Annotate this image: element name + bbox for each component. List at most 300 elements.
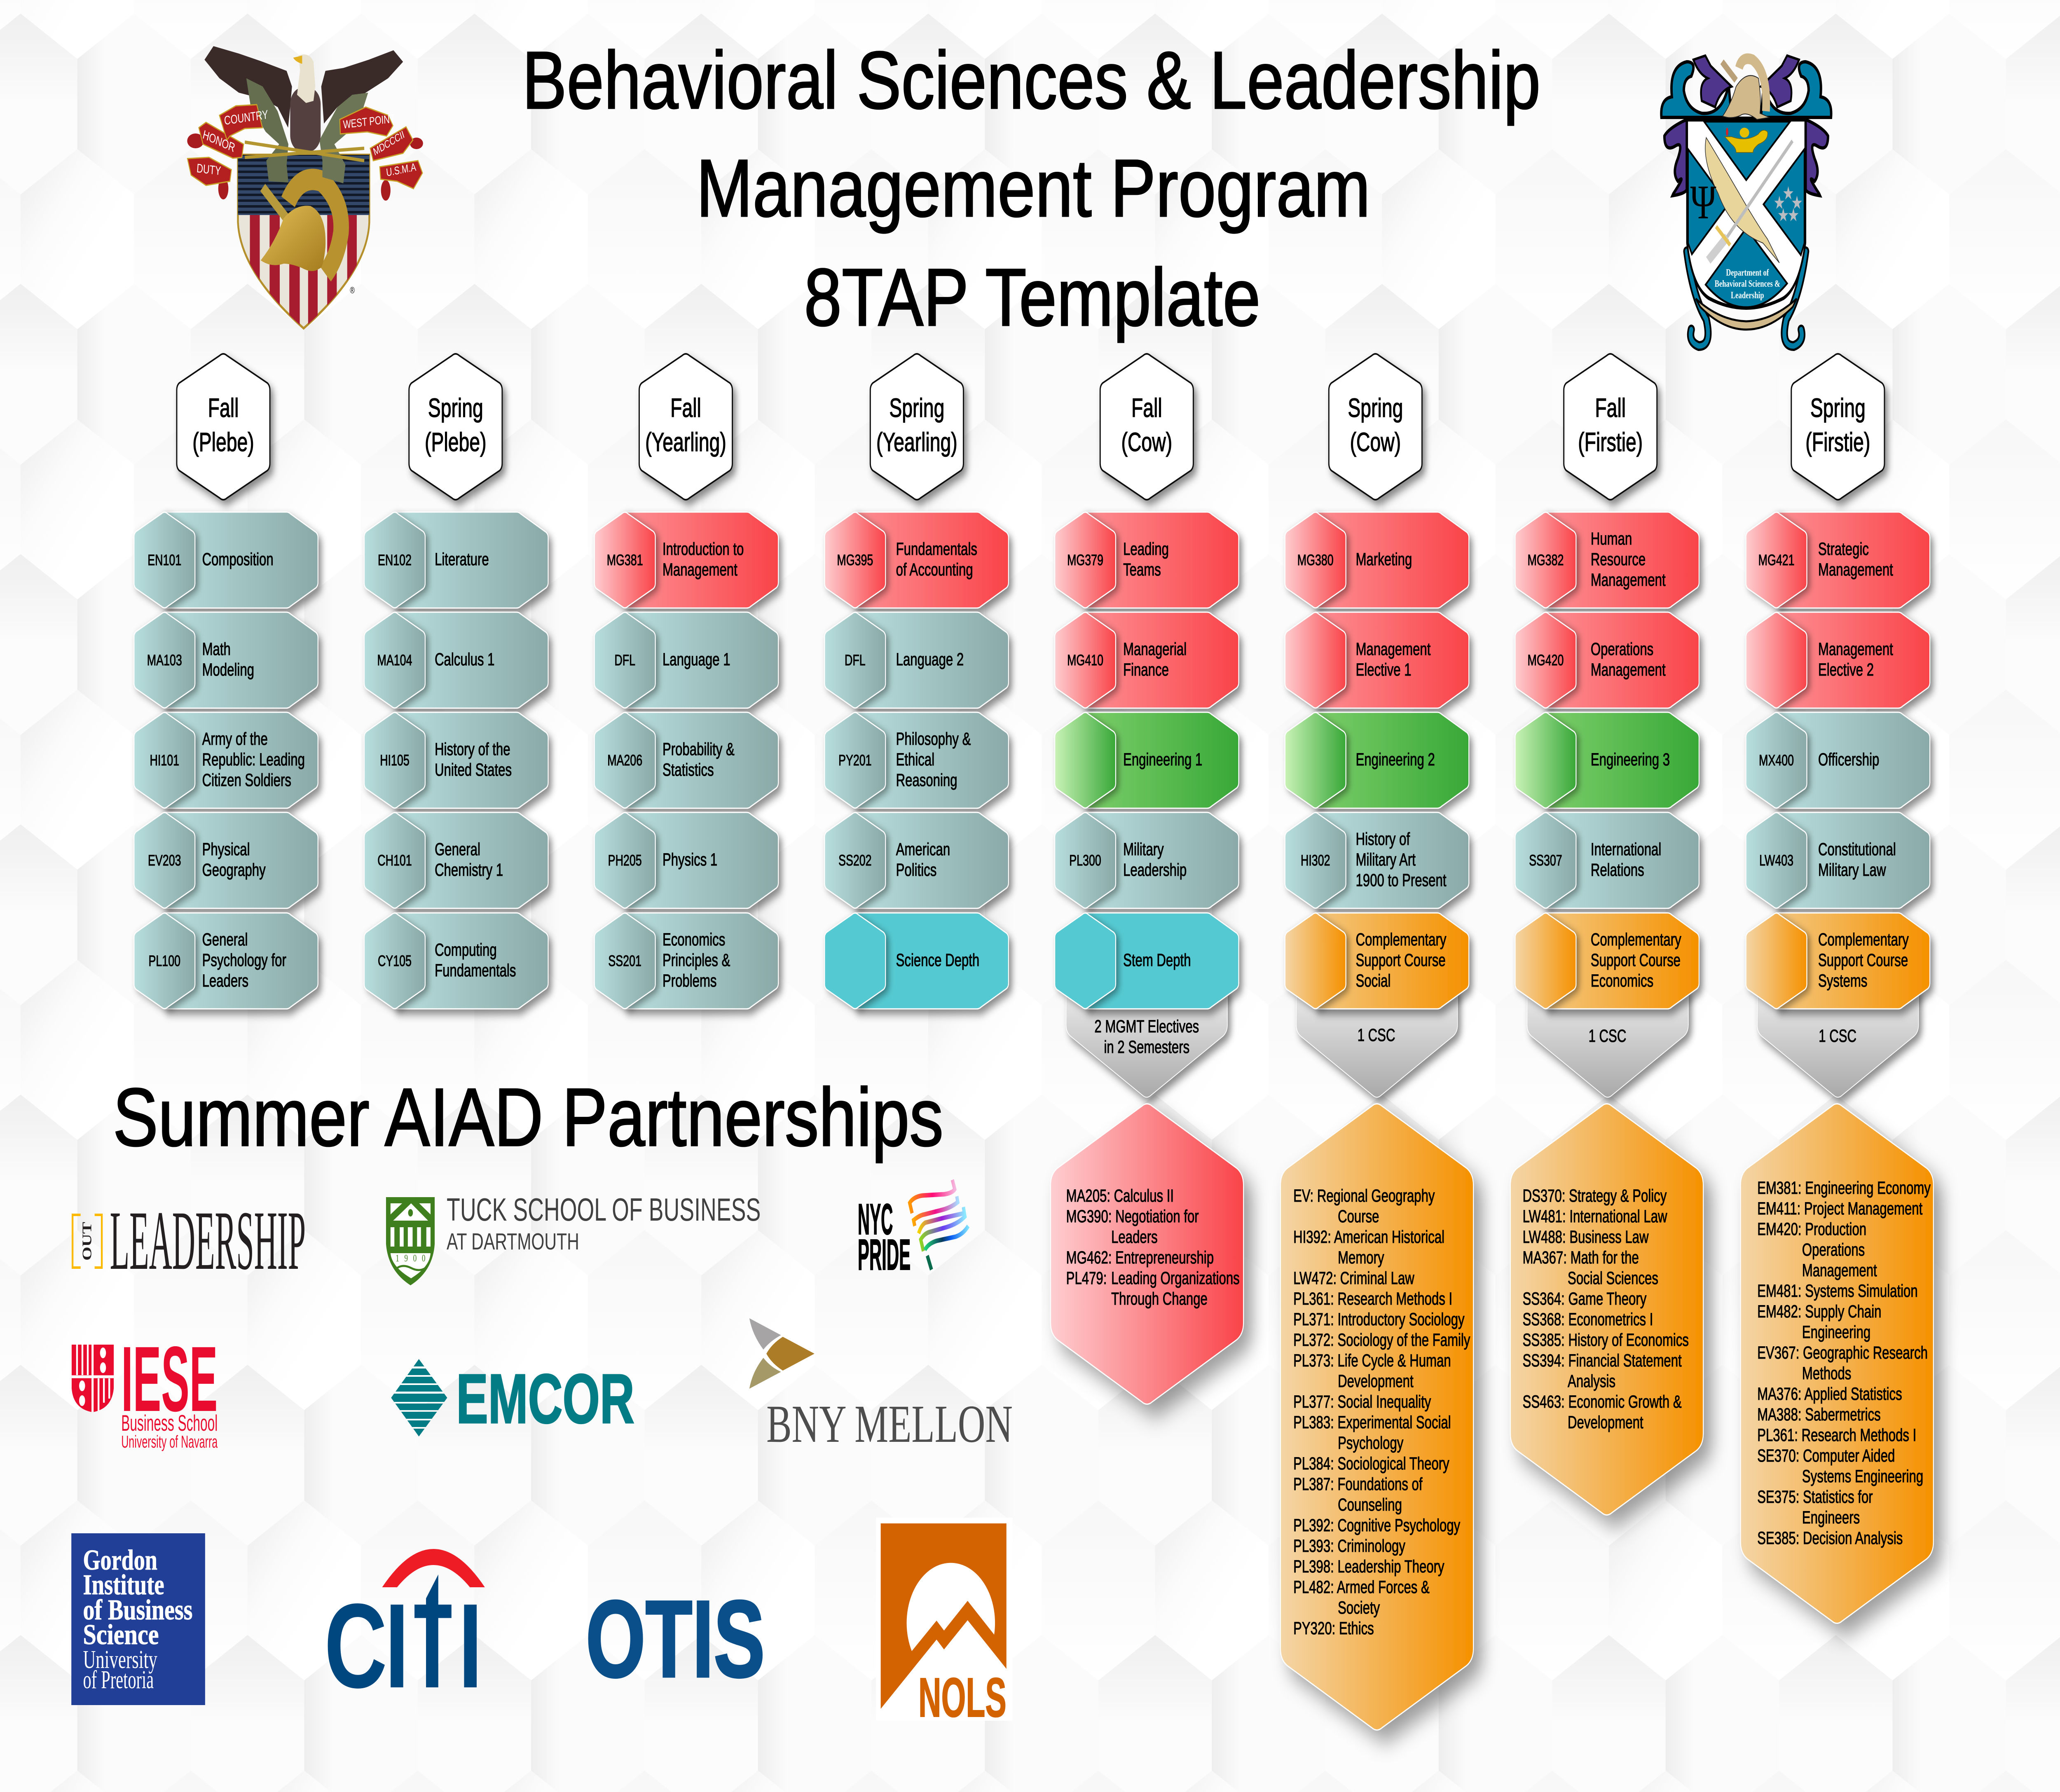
- elective list: spring cow CSC options: PL384: Sociological Theory: [1293, 1453, 1449, 1473]
- card: CH101: [364, 812, 548, 908]
- card: HI302: Military Art: [1356, 849, 1416, 869]
- card: MG410: [1055, 612, 1239, 708]
- card: CY105: Fundamentals: [435, 960, 516, 980]
- card: Management Elective 1: Management: [1356, 639, 1431, 659]
- elective list: fall firstie CSC options: MA367: Math for the: [1523, 1247, 1639, 1267]
- card: SS307: International: [1591, 839, 1661, 859]
- card: MG421: MG421: [1758, 552, 1795, 568]
- card: MG382: Resource: [1591, 549, 1646, 569]
- card: Complementary Social: Social: [1356, 971, 1390, 990]
- card: MA104: Calculus 1: [435, 649, 494, 669]
- elective list: spring cow CSC options: Psychology: [1338, 1433, 1404, 1453]
- elective list: spring firstie CSC options: SE370: Computer Aided: [1757, 1446, 1895, 1465]
- logo: IESE Business School: IESE: [121, 1327, 218, 1431]
- elective connector: 1 CSC cow: 1 CSC: [1358, 1025, 1395, 1045]
- card: CH101: Chemistry 1: [435, 860, 503, 880]
- card: MG379: MG379: [1067, 552, 1103, 568]
- column: Fall Firstie courses: [1515, 512, 1699, 1009]
- card: HI101: HI101: [150, 752, 179, 769]
- card: CH101: CH101: [377, 852, 412, 869]
- card: MA206: Probability &: [662, 739, 735, 759]
- semester header: Fall Cow: Fall: [1131, 393, 1162, 423]
- crest: Department of Behavioral Sciences and Leadership: ★: [1777, 205, 1789, 225]
- card: MG420: Operations: [1591, 639, 1653, 659]
- crest: Department of Behavioral Sciences and Leadership: ★: [1791, 193, 1803, 213]
- card: SS307: SS307: [1529, 852, 1562, 869]
- card: MA104: [364, 612, 548, 708]
- logo: Tuck School of Business: AT DARTMOUTH: [447, 1228, 579, 1255]
- card: PL100: [134, 913, 318, 1009]
- elective list: spring cow CSC options: Memory: [1338, 1247, 1384, 1267]
- card: SS202: Politics: [896, 860, 936, 880]
- logo: Gordon Institute of Business Science: of Business: [83, 1594, 192, 1626]
- elective list: spring firstie CSC options: SE385: Decision Analysis: [1757, 1528, 1903, 1548]
- elective list: spring firstie CSC options: EM381: Engineering Economy: [1757, 1178, 1931, 1198]
- card: HI302: 1900 to Present: [1356, 870, 1447, 890]
- card: Complementary Social: Support Course: [1356, 950, 1446, 970]
- card: SS307: Relations: [1591, 860, 1644, 880]
- elective list: fall firstie CSC options: LW481: International Law: [1523, 1206, 1667, 1226]
- logo: NYC Pride: [858, 1180, 968, 1279]
- semester header: Fall Firstie: (Firstie): [1578, 427, 1643, 457]
- elective list: spring cow CSC options: PY320: Ethics: [1293, 1618, 1374, 1638]
- elective list: spring cow CSC options: PL482: Armed Forces &: [1293, 1577, 1430, 1597]
- title: Management Program: [696, 142, 1370, 234]
- crest: West Point USMA: DUTY: [196, 161, 221, 178]
- card: MG420: MG420: [1528, 652, 1564, 669]
- card: MG382: MG382: [1528, 552, 1564, 568]
- elective list: fall firstie CSC options: Social Sciences: [1568, 1268, 1658, 1288]
- card: MG379: Teams: [1123, 559, 1161, 579]
- elective list: spring cow CSC options: LW472: Criminal Law: [1293, 1268, 1415, 1288]
- card: Complementary Economics: [1515, 913, 1699, 1009]
- card: MG381: [595, 512, 778, 608]
- crest: West Point USMA: WEST POINT: [343, 112, 395, 131]
- card: MG421: Management: [1818, 559, 1893, 579]
- elective list: spring firstie CSC options: Management: [1802, 1260, 1877, 1280]
- card: CY105: Computing: [435, 940, 497, 959]
- logo: Tuck School of Business: 1900: [396, 1252, 426, 1264]
- heading: Summer AIAD Partnerships: Summer AIAD Partnerships: [113, 1071, 943, 1164]
- logo: BNY Mellon: [749, 1318, 1013, 1454]
- card: Complementary Economics: Economics: [1591, 971, 1653, 990]
- elective list: fall firstie CSC options: DS370: Strategy & Policy: [1523, 1186, 1667, 1205]
- elective list: spring firstie CSC options: EV367: Geographic Research: [1757, 1343, 1928, 1362]
- elective list: spring firstie CSC options: PL361: Research Methods I: [1757, 1425, 1916, 1445]
- elective list: spring cow CSC options: PL398: Leadership Theory: [1293, 1556, 1444, 1576]
- elective list: management electives: MG390: Negotiation for: [1066, 1206, 1199, 1226]
- card: PL300: PL300: [1069, 852, 1101, 869]
- elective list: spring firstie CSC options: MA376: Applied Statistics: [1757, 1384, 1902, 1404]
- elective connector: 1 CSC firstie spring: 1 CSC: [1819, 1026, 1856, 1046]
- elective list: spring firstie CSC options: [1741, 1104, 1934, 1623]
- semester header: Spring Yearling: Spring: [889, 393, 944, 423]
- logo: BNY Mellon: BNY MELLON: [766, 1394, 1013, 1454]
- card: LW403: [1746, 812, 1930, 908]
- card: MA104: MA104: [377, 652, 412, 669]
- logo: Out Leadership: LEADERSHIP: [110, 1193, 306, 1287]
- card: HI105: HI105: [380, 752, 410, 769]
- elective list: fall firstie CSC options: SS368: Econometrics I: [1523, 1309, 1653, 1329]
- card: DFL Language 1: DFL: [614, 652, 635, 669]
- logo: Out Leadership: [73, 1193, 306, 1287]
- card: EN101: EN101: [147, 552, 181, 568]
- elective list: spring firstie CSC options: EM420: Production: [1757, 1219, 1866, 1239]
- crest: Department of Behavioral Sciences and Leadership: ★: [1782, 183, 1794, 204]
- elective list: spring firstie CSC options: Operations: [1802, 1240, 1865, 1259]
- card: HI101: [134, 712, 318, 808]
- card: Science Depth: Science Depth: [896, 950, 979, 970]
- card: MG421: Strategic: [1818, 539, 1869, 559]
- card: MG420: [1515, 612, 1699, 708]
- card: MG421: [1746, 512, 1930, 608]
- semester header: Spring Cow: [1329, 354, 1422, 500]
- card: EV203: Geography: [202, 860, 266, 880]
- logo: Citi: I: [385, 1579, 409, 1713]
- card: PY201: Philosophy &: [896, 729, 971, 749]
- title: [522, 34, 1540, 343]
- crest: West Point USMA: [187, 46, 423, 335]
- elective list: management electives: MG462: Entrepreneurship: [1066, 1247, 1214, 1267]
- card: Complementary Systems: [1746, 913, 1930, 1009]
- elective list: spring cow CSC options: [1280, 1104, 1474, 1730]
- semester header: Fall Plebe: (Plebe): [192, 427, 254, 457]
- crest: Department of Behavioral Sciences and Leadership: Department of: [1726, 268, 1769, 278]
- card: CY105: CY105: [378, 952, 412, 969]
- elective list: management electives: Leaders: [1111, 1227, 1158, 1247]
- elective list: spring cow CSC options: PL373: Life Cycle & Human: [1293, 1350, 1451, 1370]
- logo: Citi: T: [414, 1579, 452, 1713]
- elective list: fall firstie CSC options: Development: [1568, 1412, 1643, 1432]
- card: SS201: Economics: [662, 929, 725, 949]
- card: MA206: Statistics: [662, 760, 714, 779]
- elective list: management electives: Leading Organizations: [1111, 1268, 1240, 1288]
- card: MG410: Finance: [1123, 660, 1169, 679]
- logo: EMCOR: EMCOR: [456, 1360, 634, 1438]
- column: Spring Cow courses: [1285, 512, 1469, 1009]
- card: MG380: [1285, 512, 1469, 608]
- logo: NOLS: NOLS: [918, 1666, 1007, 1729]
- card: HI101: Republic: Leading: [202, 749, 305, 769]
- elective list: spring cow CSC options: PL383: Experimental Social: [1293, 1412, 1451, 1432]
- card: SS307: [1515, 812, 1699, 908]
- card: Engineering 2: Engineering 2: [1356, 749, 1435, 769]
- card: Complementary Systems: Complementary: [1818, 929, 1909, 949]
- elective list: spring firstie CSC options: MA388: Sabermetrics: [1757, 1404, 1881, 1424]
- card: PH205: PH205: [608, 852, 642, 869]
- column: Spring Plebe courses: [364, 512, 548, 1009]
- card: MG380: Marketing: [1356, 549, 1412, 569]
- card: Complementary Systems: Support Course: [1818, 950, 1908, 970]
- elective list: spring cow CSC options: Counseling: [1338, 1495, 1402, 1514]
- card: MG379: Leading: [1123, 539, 1169, 559]
- column: Fall Cow courses: [1055, 512, 1239, 1009]
- elective list: spring cow CSC options: Course: [1338, 1206, 1379, 1226]
- semester header: Fall Yearling: Fall: [670, 393, 701, 423]
- card: EN102: [364, 512, 548, 608]
- elective list: fall firstie CSC options: Analysis: [1568, 1371, 1615, 1391]
- crest: Department of Behavioral Sciences and Leadership: [1661, 56, 1831, 346]
- logo: Gordon Institute of Business Science: Institute: [83, 1569, 164, 1601]
- semester header: Spring Yearling: [870, 354, 963, 500]
- crest: West Point USMA: U.S.M.A: [386, 161, 417, 179]
- card: MG382: Management: [1591, 570, 1666, 590]
- card: Engineering 3: Engineering 3: [1591, 749, 1670, 769]
- elective connector: 2 MGMT Electives: in 2 Semesters: [1104, 1037, 1189, 1057]
- card: DFL Language 1: Language 1: [662, 649, 730, 669]
- elective list: spring firstie CSC options: SE375: Statistics for: [1757, 1487, 1873, 1507]
- card: MG380: MG380: [1297, 552, 1334, 568]
- semester header: Spring Cow: (Cow): [1350, 427, 1401, 457]
- elective list: spring cow CSC options: PL361: Research Methods I: [1293, 1289, 1452, 1308]
- logo: Gordon Institute of Business Science: of Pretoria: [83, 1666, 154, 1694]
- card: HI105: History of the: [435, 739, 510, 759]
- card: PL100: General: [202, 929, 248, 949]
- crest: Department of Behavioral Sciences and Leadership: Leadership: [1731, 290, 1764, 301]
- card: MA103: Modeling: [202, 660, 254, 679]
- card: HI302: History of: [1356, 829, 1410, 849]
- card: SS202: American: [896, 839, 950, 859]
- card: Stem Depth: Stem Depth: [1123, 950, 1191, 970]
- card: DFL Language 2: [824, 612, 1009, 708]
- elective list: management electives: Through Change: [1111, 1289, 1208, 1308]
- elective list: fall firstie CSC options: [1510, 1104, 1703, 1515]
- elective list: spring firstie CSC options: Engineers: [1802, 1507, 1860, 1527]
- logo: Out Leadership: OUT: [80, 1222, 94, 1261]
- card: HI105: [364, 712, 548, 808]
- semester header: Fall Yearling: (Yearling): [645, 427, 726, 457]
- card: HI302: [1285, 812, 1469, 908]
- card: Management Elective 2: Elective 2: [1818, 660, 1874, 679]
- logo: NYC Pride: NYC: [858, 1195, 893, 1244]
- crest: Department of Behavioral Sciences and Leadership: Behavioral Sciences &: [1715, 279, 1780, 289]
- card: MA206: [595, 712, 778, 808]
- semester header: Spring Plebe: [409, 354, 502, 500]
- logo: Citi: C: [324, 1579, 387, 1713]
- card: PY201: PY201: [838, 752, 872, 769]
- card: MG382: Human: [1591, 529, 1632, 548]
- card: DFL Language 2: Language 2: [896, 649, 964, 669]
- card: SS202: SS202: [838, 852, 872, 869]
- title: 8TAP Template: [804, 251, 1260, 343]
- elective list: spring firstie CSC options: Engineering: [1802, 1322, 1870, 1342]
- logo: Gordon Institute of Business Science: [71, 1533, 205, 1705]
- logo: IESE Business School: [72, 1327, 218, 1451]
- elective list: spring cow CSC options: EV: Regional Geography: [1293, 1186, 1435, 1205]
- card: DFL Language 1: [595, 612, 778, 708]
- card: MG395: MG395: [837, 552, 873, 568]
- elective list: spring cow CSC options: PL387: Foundations of: [1293, 1474, 1423, 1494]
- card: Management Elective 1: Elective 1: [1356, 660, 1412, 679]
- card: HI105: United States: [435, 760, 512, 779]
- card: MG395: of Accounting: [896, 559, 973, 579]
- card: Science Depth: [824, 913, 1009, 1009]
- semester header: Spring Cow: Spring: [1348, 393, 1403, 423]
- card: SS201: Principles &: [662, 950, 730, 970]
- semester header: Spring Plebe: (Plebe): [425, 427, 487, 457]
- card: HI302: HI302: [1301, 852, 1330, 869]
- card: MA103: MA103: [147, 652, 182, 669]
- elective connector: 1 CSC firstie fall: 1 CSC: [1589, 1026, 1626, 1046]
- elective list: spring cow CSC options: PL377: Social Inequality: [1293, 1392, 1431, 1411]
- card: MG410: MG410: [1067, 652, 1103, 669]
- elective list: spring cow CSC options: PL392: Cognitive Psychology: [1293, 1515, 1460, 1535]
- card: Complementary Systems: Systems: [1818, 971, 1867, 990]
- logo: Gordon Institute of Business Science: Gordon: [83, 1544, 157, 1576]
- crest: West Point USMA: MDCCCII: [372, 128, 406, 158]
- card: Engineering 3: [1515, 712, 1699, 808]
- elective list: spring cow CSC options: HI392: American Historical: [1293, 1227, 1444, 1247]
- card: Complementary Economics: Complementary: [1591, 929, 1681, 949]
- card: Management Elective 2: [1746, 612, 1930, 708]
- logo: IESE Business School: University of Navarra: [121, 1432, 218, 1451]
- semester header: Spring Plebe: Spring: [428, 393, 483, 423]
- card: SS201: [595, 913, 778, 1009]
- logo: Tuck School of Business: TUCK SCHOOL OF BUSINESS: [447, 1192, 761, 1228]
- logo: Gordon Institute of Business Science: University: [83, 1645, 157, 1674]
- card: Complementary Social: [1285, 913, 1469, 1009]
- semester header: Fall Cow: [1100, 354, 1193, 500]
- logo: Citi: I: [458, 1579, 482, 1713]
- card: MX400: Officership: [1818, 749, 1879, 769]
- card: PH205: Physics 1: [662, 849, 717, 869]
- card: LW403: Constitutional: [1818, 839, 1896, 859]
- card: EN101: Composition: [202, 549, 274, 569]
- card: Management Elective 2: Management: [1818, 639, 1893, 659]
- card: MX400: [1746, 712, 1930, 808]
- card: MG381: Management: [662, 559, 737, 579]
- card: MG395: [824, 512, 1009, 608]
- elective list: management electives: MA205: Calculus II: [1066, 1186, 1174, 1205]
- card: MG379: [1055, 512, 1239, 608]
- crest: Department of Behavioral Sciences and Leadership: ★: [1788, 205, 1799, 225]
- card: Complementary Economics: Support Course: [1591, 950, 1681, 970]
- card: SS201: SS201: [608, 952, 641, 969]
- elective list: fall firstie CSC options: SS463: Economic Growth &: [1523, 1392, 1682, 1411]
- elective list: spring cow CSC options: PL393: Criminology: [1293, 1536, 1405, 1556]
- card: CH101: General: [435, 839, 480, 859]
- elective list: fall firstie CSC options: LW488: Business Law: [1523, 1227, 1649, 1247]
- crest: Department of Behavioral Sciences and Leadership: ★: [1774, 193, 1785, 213]
- card: Engineering 2: [1285, 712, 1469, 808]
- card: EV203: EV203: [148, 852, 181, 869]
- semester header: Fall Cow: (Cow): [1121, 427, 1172, 457]
- card: Management Elective 1: [1285, 612, 1469, 708]
- elective list: fall firstie CSC options: SS385: History of Economics: [1523, 1330, 1689, 1350]
- card: PY201: Reasoning: [896, 770, 957, 790]
- card: Stem Depth: [1055, 913, 1239, 1009]
- logo: Gordon Institute of Business Science: Science: [83, 1619, 159, 1651]
- column: Spring Firstie courses: [1746, 512, 1930, 1009]
- elective list: spring firstie CSC options: EM482: Supply Chain: [1757, 1301, 1881, 1321]
- card: EV203: [134, 812, 318, 908]
- card: EN102: Literature: [435, 549, 489, 569]
- elective connector: 1 CSC firstie spring: [1757, 989, 1919, 1097]
- card: PL100: Psychology for: [202, 950, 286, 970]
- card: Complementary Social: Complementary: [1356, 929, 1447, 949]
- card: HI101: Army of the: [202, 729, 268, 749]
- title: Behavioral Sciences & Leadership: [522, 34, 1540, 126]
- logo: Otis: OTIS: [586, 1579, 765, 1700]
- card: PY201: [824, 712, 1009, 808]
- logo: Citi: [324, 1549, 485, 1713]
- elective connector: 2 MGMT Electives: [1066, 989, 1227, 1097]
- card: SS202: [824, 812, 1009, 908]
- crest: Department of Behavioral Sciences and Leadership: Ψ: [1690, 175, 1716, 229]
- elective connector: 2 MGMT Electives: 2 MGMT Electives: [1094, 1016, 1199, 1036]
- card: Engineering 1: [1055, 712, 1239, 808]
- card: MA206: MA206: [607, 752, 642, 769]
- card: PL100: PL100: [149, 952, 180, 969]
- crest: West Point USMA: HONOR: [201, 127, 236, 155]
- elective list: fall firstie CSC options: SS394: Financial Statement: [1523, 1350, 1682, 1370]
- card: MA103: Math: [202, 639, 231, 659]
- card: MG395: Fundamentals: [896, 539, 977, 559]
- elective list: spring firstie CSC options: Systems Engineering: [1802, 1466, 1923, 1486]
- card: PH205: [595, 812, 778, 908]
- card: Engineering 1: Engineering 1: [1123, 749, 1202, 769]
- card: PL300: Leadership: [1123, 860, 1187, 880]
- card: MX400: MX400: [1759, 752, 1794, 769]
- card: PL300: [1055, 812, 1239, 908]
- card: PL300: Military: [1123, 839, 1164, 859]
- card: EN102: EN102: [378, 552, 412, 568]
- semester header: Spring Firstie: Spring: [1810, 393, 1866, 423]
- card: MA103: [134, 612, 318, 708]
- elective list: management electives: [1051, 1104, 1243, 1404]
- logo: Tuck School of Business: [386, 1192, 761, 1285]
- card: EV203: Physical: [202, 839, 250, 859]
- column: Fall Plebe courses: [134, 512, 318, 1009]
- logo: EMCOR: [388, 1359, 634, 1438]
- semester header: Fall Firstie: [1564, 354, 1657, 500]
- elective list: spring cow CSC options: Society: [1338, 1598, 1380, 1617]
- semester header: Fall Plebe: Fall: [208, 393, 239, 423]
- elective connector: 1 CSC cow: [1296, 989, 1458, 1097]
- column: Spring Yearling courses: [824, 512, 1009, 1009]
- semester header: Spring Firstie: [1791, 354, 1884, 500]
- semester header: Fall Firstie: Fall: [1595, 393, 1626, 423]
- card: PL100: Leaders: [202, 971, 248, 990]
- semester header: Fall Yearling: [639, 354, 733, 500]
- elective list: spring firstie CSC options: EM481: Systems Simulation: [1757, 1281, 1918, 1301]
- logo: NYC Pride: PRIDE: [858, 1230, 911, 1279]
- elective list: spring firstie CSC options: Methods: [1802, 1363, 1851, 1383]
- semester header: Spring Firstie: (Firstie): [1805, 427, 1870, 457]
- elective list: spring cow CSC options: Development: [1338, 1371, 1414, 1391]
- card: DFL Language 2: DFL: [845, 652, 866, 669]
- card: HI101: Citizen Soldiers: [202, 770, 291, 790]
- card: LW403: LW403: [1759, 852, 1793, 869]
- logo: IESE Business School: Business School: [121, 1411, 218, 1436]
- semester header: Fall Plebe: [177, 354, 270, 500]
- elective list: spring firstie CSC options: EM411: Project Management: [1757, 1198, 1923, 1218]
- card: CY105: [364, 913, 548, 1009]
- card: SS201: Problems: [662, 971, 717, 990]
- card: LW403: Military Law: [1818, 860, 1886, 880]
- semester header: Spring Yearling: (Yearling): [876, 427, 957, 457]
- card: MG381: MG381: [607, 552, 643, 568]
- elective list: spring cow CSC options: PL372: Sociology of the Family: [1293, 1330, 1470, 1350]
- card: MG410: Managerial: [1123, 639, 1187, 659]
- elective connector: 1 CSC firstie fall: [1527, 989, 1688, 1097]
- elective list: management electives: PL479:: [1066, 1268, 1107, 1288]
- card: MG381: Introduction to: [662, 539, 744, 559]
- card: MG420: Management: [1591, 660, 1666, 679]
- card: PY201: Ethical: [896, 749, 934, 769]
- card: MG382: [1515, 512, 1699, 608]
- crest: West Point USMA: COUNTRY: [224, 107, 269, 128]
